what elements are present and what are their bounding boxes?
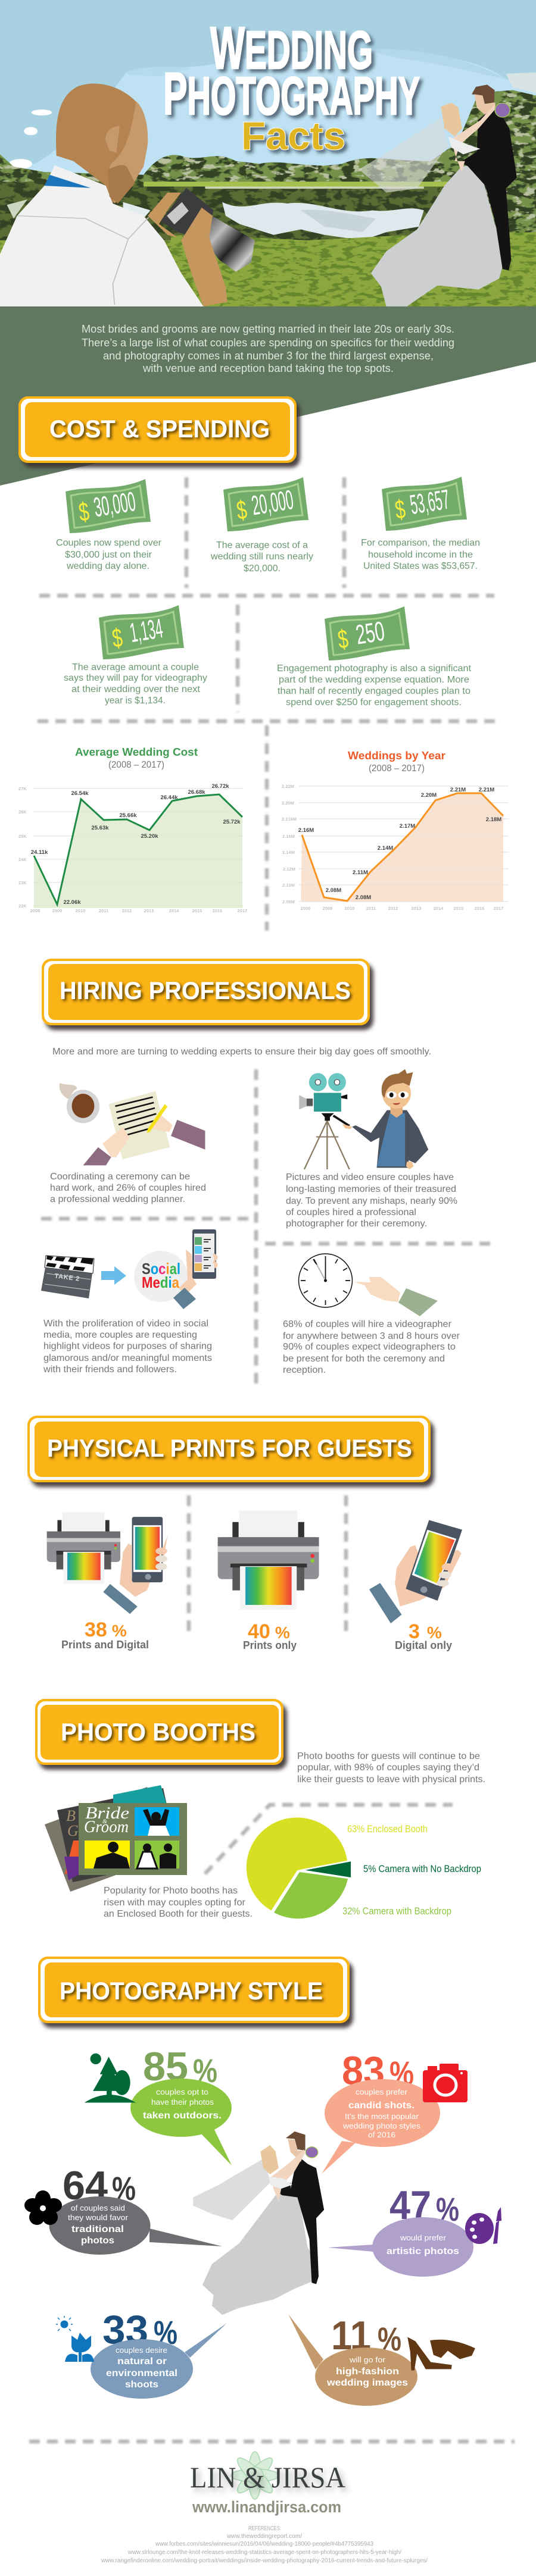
text: enclosed booth: risen with may couples opting for: [104, 1898, 246, 1908]
chart: average wedding cost: 26.54k: [71, 790, 89, 797]
bubble: 83% candid: couples prefer: [356, 2088, 407, 2096]
icon: photo strips: G: [67, 1822, 79, 1839]
bubble: 85% outdoors: [130, 2044, 232, 2165]
text: average cost: $20,000.: [244, 564, 281, 574]
bill: $250: $: [336, 624, 350, 655]
text: median income: United States was $53,657.: [363, 561, 478, 571]
heading: photography style: [38, 1957, 350, 2023]
references: www.slrlounge.com/the-knot-releases-wedding-statistics-average-spent-on-photographers-hits-5-year-high/: [127, 2549, 401, 2556]
bubble: 85% outdoors: couples opt to: [156, 2088, 208, 2096]
bill: $1,134: 1,134: [127, 612, 165, 648]
bubble: 64% traditional: they would favor: [68, 2214, 128, 2222]
chart: weddings by year: 2.08M: [282, 899, 295, 904]
stat: prints only: 40 %: [248, 1620, 290, 1643]
text: engagement photography: spend over $250 for engagement shoots.: [286, 697, 462, 708]
bubble: 83% candid: It’s the most popular: [345, 2112, 419, 2121]
text: planner: [50, 1172, 206, 1204]
stat: prints only: Prints only: [243, 1639, 297, 1651]
text: videographer: [283, 1319, 460, 1375]
bubble: 85% outdoors: taken outdoors.: [143, 2111, 222, 2121]
chart: weddings by year: 2014: [434, 906, 444, 911]
bubble: 47% artistic: would prefer: [400, 2234, 446, 2242]
chart: weddings by year: 2.22M: [282, 784, 294, 789]
icon: clapper board: [41, 1256, 94, 1298]
bubble: 33% natural: shoots: [125, 2380, 158, 2390]
chart: weddings by year: 2013: [412, 906, 421, 911]
text: planner: a professional wedding planner.: [50, 1194, 185, 1204]
chart: average wedding cost: 26.72k: [211, 783, 229, 790]
heading: hiring professionals: HIRING PROFESSIONALS: [60, 976, 351, 1004]
bill: $53,657: 53,657: [408, 483, 451, 520]
chart: average wedding cost: 26K: [18, 809, 27, 815]
bubble: 64% traditional: 64: [63, 2163, 108, 2208]
chart: weddings by year: 2.16M: [298, 827, 314, 834]
icon: social media hand and phone: [134, 1229, 217, 1309]
icon: large printer: [218, 1511, 319, 1610]
green band background: [0, 306, 536, 486]
chart: average wedding cost: 25.66k: [119, 812, 137, 819]
bubble: 64% traditional: [49, 2163, 222, 2255]
chart: average wedding cost: 26.68k: [188, 789, 205, 796]
chart: weddings by year: 2.12M: [283, 866, 295, 872]
bill: $30,000: $: [77, 497, 91, 527]
text: social video: media, more couples are requesting: [43, 1330, 197, 1340]
hero illustration: [0, 0, 536, 306]
chart: average wedding cost: 2015: [192, 908, 202, 913]
title: [163, 15, 420, 158]
chart: average wedding cost: 2017: [238, 908, 247, 913]
heading: photo booths: PHOTO BOOTHS: [61, 1718, 255, 1746]
logo: lin and jirsa: LIN & JIRSA: [190, 2461, 345, 2494]
chart: average wedding cost: [18, 746, 247, 913]
icon: flower: [24, 2190, 62, 2225]
text: couples spend: [56, 538, 162, 571]
chart: average wedding cost: 24.11k: [31, 849, 48, 856]
chart: weddings by year: 2.20M: [282, 800, 294, 806]
icon: social media hand and phone: Media: [142, 1273, 179, 1291]
bubble: 83% candid: wedding photo styles: [342, 2122, 420, 2130]
heading: cost and spending: [18, 396, 297, 463]
text: engagement photography: than half of recently engaged couples plan to: [278, 686, 470, 696]
heading: hiring professionals: [42, 959, 370, 1025]
text: engagement photography: Engagement photography is also a significant: [277, 663, 472, 674]
text: engagement photography: part of the wedding expense equation. More: [279, 675, 469, 685]
text: photographer: of couples hired a professional: [286, 1207, 416, 1217]
chart: average wedding cost: 22K: [18, 903, 27, 909]
bubble: 83% candid: of 2016: [368, 2131, 395, 2139]
text: photographer: [286, 1172, 457, 1229]
bubble: 47% artistic: %: [436, 2190, 459, 2228]
text: videographer: be present for both the ceremony and: [283, 1354, 445, 1364]
bubble: 11% high fashion: high-fashion: [336, 2367, 399, 2377]
text: videographer: for anywhere between 3 and 8 hours over: [283, 1331, 460, 1341]
text: median income: [361, 538, 480, 571]
chart: weddings by year: 2.18M: [486, 816, 501, 823]
panel: hiring professionals: [41, 959, 460, 1375]
chart: average wedding cost: (2008 – 2017): [108, 760, 164, 770]
text: videography: The average amount a couple: [72, 662, 199, 672]
text: social video: With the proliferation of video in social: [43, 1319, 208, 1329]
text: average cost: wedding still runs nearly: [210, 552, 313, 562]
chart: weddings by year: 2016: [475, 906, 484, 911]
text: median income: For comparison, the median: [361, 538, 480, 548]
text: booths popular: Photo booths for guests will continue to be: [297, 1751, 480, 1761]
icon: hand with phone: [369, 1520, 462, 1623]
text: videographer: reception.: [283, 1365, 326, 1375]
bubble: 64% traditional: photos: [81, 2236, 114, 2246]
stat: digital only: Digital only: [395, 1639, 452, 1651]
bubble: 33% natural: [91, 2307, 227, 2399]
chart: average wedding cost: Average Wedding Cost: [75, 746, 198, 758]
intro text: and photography comes in at number 3 for the third largest expense,: [103, 349, 434, 362]
bill: $30,000: [66, 479, 151, 533]
chart: average wedding cost: 2009: [52, 908, 62, 913]
intro text: There’s a large list of what couples are spending on specifics for their wedding: [82, 336, 454, 349]
icon: film camera and man: [299, 1069, 428, 1169]
text: enclosed booth: Popularity for Photo booths has: [104, 1886, 238, 1896]
tree line: [0, 90, 536, 235]
references: www.rangefinderonline.com/wedding-portrait/weddings/inside-wedding-photography-2016-current-trends-and-future-splurges/: [101, 2558, 428, 2564]
chart: weddings by year: 2.20M: [421, 792, 437, 799]
panel: photo booths: [35, 1699, 485, 1919]
chart: average wedding cost: 2016: [213, 908, 222, 913]
intro text: Most brides and grooms are now getting married in their late 20s or early 30s.: [82, 323, 454, 335]
icon: photo strips: Groom: [84, 1818, 129, 1836]
bubble: 11% high fashion: wedding images: [326, 2378, 408, 2388]
icon: printer and phone: [47, 1513, 167, 1614]
bubble: 83% candid: candid shots.: [348, 2101, 415, 2111]
chart: average wedding cost: 2010: [76, 908, 85, 913]
stat: prints and digital: [61, 1619, 149, 1651]
chart: weddings by year: 2.16M: [282, 834, 295, 839]
references: REFERENCES:: [248, 2525, 281, 2532]
icon: social media hand and phone: Social: [142, 1260, 180, 1278]
bubble: 33% natural: natural or: [117, 2356, 167, 2367]
bill: $20,000: [223, 477, 308, 531]
text: videography: [64, 662, 207, 706]
camera and hands: [148, 188, 255, 306]
text: enclosed booth: [104, 1886, 253, 1919]
logo: ornament: [231, 2452, 279, 2499]
chart: average wedding cost: 2013: [144, 908, 154, 913]
bubble: 64% traditional: of couples said: [71, 2204, 125, 2212]
bubble: 83% candid: [322, 2048, 440, 2174]
bubble: 33% natural: couples desire: [116, 2346, 167, 2355]
chart: average wedding cost: 27K: [18, 786, 27, 791]
chart: weddings by year: Weddings by Year: [348, 750, 445, 762]
text: social video: with their friends and followers.: [43, 1364, 177, 1375]
chart: weddings by year: 2.08M: [326, 887, 341, 894]
bubble: 11% high fashion: [288, 2313, 417, 2406]
chart: weddings by year: 2.10M: [282, 882, 295, 888]
text: planner: hard work, and 26% of couples hired: [50, 1183, 206, 1193]
text: photographer: day. To prevent any mishaps, nearly 90%: [286, 1196, 457, 1206]
chart: weddings by year: 2.14M: [282, 850, 295, 855]
text: videography: says they will pay for videography: [64, 673, 207, 683]
text: planner: Coordinating a ceremony can be: [50, 1172, 190, 1182]
bubble: 64% traditional: %: [112, 2170, 136, 2207]
heading: physical prints for guests: PHYSICAL PRINTS FOR GUESTS: [47, 1434, 412, 1462]
references: [101, 2525, 428, 2564]
stat: digital only: 3 %: [409, 1620, 442, 1643]
icon: photo strips: &: [102, 1818, 107, 1825]
icon: planner writing: [60, 1083, 205, 1165]
icon: tulip and sun: [56, 2316, 94, 2362]
chart: weddings by year: 2008: [301, 906, 310, 911]
bill: $1,134: [99, 605, 184, 659]
bubble: 47% artistic: 47: [389, 2183, 431, 2228]
bride and groom: [359, 84, 517, 306]
chart: average wedding cost: 2008: [30, 908, 40, 913]
text: average cost: [210, 540, 313, 574]
panel: footer: [101, 2452, 428, 2564]
text: booths popular: popular, with 98% of couples saying they’d: [297, 1763, 479, 1773]
icon: camera: [423, 2064, 468, 2102]
text: enclosed booth: an Enclosed Booth for their guests.: [104, 1909, 253, 1919]
chart: weddings by year: 2012: [388, 906, 398, 911]
panel: cost and spending: [18, 396, 509, 913]
text: engagement photography: [277, 663, 472, 708]
text: booths popular: like their guests to leave with physical prints.: [297, 1774, 485, 1785]
bill: $30,000: 30,000: [92, 486, 138, 522]
text: couples spend: Couples now spend over: [56, 538, 162, 548]
stat: digital only: [395, 1620, 452, 1651]
arrow: clapper to social media: [101, 1266, 126, 1285]
bill: $250: [325, 606, 410, 661]
bubble: 33% natural: 33: [102, 2307, 148, 2352]
bubble: 83% candid: %: [389, 2054, 414, 2092]
chart: average wedding cost: 2012: [122, 908, 132, 913]
bubble: 33% natural: environmental: [106, 2368, 177, 2378]
text: couples spend: wedding day alone.: [66, 561, 149, 571]
bubble: 33% natural: %: [154, 2314, 177, 2351]
text: booths popular: [297, 1751, 485, 1785]
bubble: 11% high fashion: 11: [331, 2313, 371, 2358]
chart: average wedding cost: 25.72k: [223, 819, 241, 825]
icon: trees: [85, 2054, 136, 2102]
chart: average wedding cost: 2011: [99, 908, 108, 913]
panel: photography style: [24, 1957, 501, 2406]
text: videographer: 90% of couples expect videographers to: [283, 1342, 456, 1352]
bubble: 85% outdoors: have their photos: [151, 2098, 214, 2107]
stat: prints and digital: Prints and Digital: [61, 1639, 149, 1651]
panel: physical prints: [27, 1416, 462, 1651]
text: median income: household income in the: [368, 550, 473, 560]
website: www.linandjirsa.com: [192, 2498, 341, 2516]
heading: photography style: PHOTOGRAPHY STYLE: [60, 1977, 323, 2005]
chart: weddings by year: (2008 – 2017): [369, 763, 425, 774]
bill: $20,000: 20,000: [250, 484, 295, 521]
pie chart: booth types: 63% Enclosed Booth: [347, 1824, 428, 1835]
references: www.forbes.com/sites/winniesun/2016/04/06/wedding-18000-people/#4b4775395943: [155, 2541, 373, 2547]
text: photographer: Pictures and video ensure couples have: [286, 1172, 454, 1182]
title: WEDDING: [210, 15, 373, 82]
icon: clock and pointing hand: [299, 1254, 438, 1316]
chart: average wedding cost: 24K: [18, 857, 27, 862]
intro text: [82, 323, 454, 374]
text: social video: [43, 1319, 212, 1375]
bill: $53,657: $: [393, 494, 407, 525]
chart: weddings by year: 2011: [366, 906, 376, 911]
icon: clapper board: TAKE 2: [54, 1273, 80, 1283]
lake: [0, 181, 451, 240]
chart: weddings by year: [282, 750, 509, 911]
text: photographer: photographer for their ceremony.: [286, 1219, 427, 1229]
chart: weddings by year: 2009: [323, 906, 332, 911]
icon: shoe and sunglasses: [407, 2337, 475, 2370]
text: average cost: The average cost of a: [216, 540, 308, 550]
bubble: 47% artistic: [328, 2183, 473, 2277]
photographer head: [56, 83, 148, 204]
icon: photo strips: [45, 1785, 187, 1892]
bubble: 83% candid: 83: [342, 2048, 385, 2093]
chart: weddings by year: 2.21M: [479, 787, 494, 793]
photographer shirt: [0, 165, 204, 306]
chart: average wedding cost: 26.44k: [160, 794, 178, 801]
intro line: More and more are turning to wedding experts to ensure their big day goes off smoothly.: [52, 1047, 431, 1057]
chart: weddings by year: 2.17M: [400, 823, 415, 830]
text: social video: highlight videos for purposes of sharing: [43, 1341, 212, 1351]
chart: average wedding cost: 22.06k: [63, 899, 81, 906]
chart: weddings by year: 2.08M: [356, 894, 371, 901]
chart: weddings by year: 2.21M: [450, 787, 466, 793]
chart: weddings by year: 2.11M: [353, 869, 368, 876]
pie chart: booth types: [247, 1817, 481, 1918]
stat: prints and digital: 38 %: [85, 1619, 127, 1641]
title: Facts: [241, 114, 345, 158]
text: videographer: 68% of couples will hire a videographer: [283, 1319, 452, 1329]
bubble: 47% artistic: artistic photos: [387, 2246, 459, 2256]
chart: weddings by year: 2015: [454, 906, 463, 911]
chart: weddings by year: 2.216M: [282, 816, 297, 822]
icon: palette and brush: [465, 2207, 501, 2244]
bubble: 85% outdoors: %: [193, 2052, 217, 2089]
chart: average wedding cost: 25.20k: [141, 833, 158, 840]
pie chart: booth types: 5% Camera with No Backdrop: [363, 1864, 481, 1874]
icon: photo strips: Bride: [85, 1804, 129, 1823]
text: couples spend: $30,000 just on their: [65, 550, 152, 560]
icon: photo strips: B: [66, 1807, 76, 1824]
blue collar: [45, 175, 91, 188]
heading: physical prints for guests: [27, 1416, 431, 1482]
bill: $20,000: $: [235, 495, 249, 525]
stat: prints only: [243, 1620, 297, 1651]
chart: weddings by year: 2.14M: [378, 845, 393, 852]
text: photographer: long-lasting memories of their treasured: [286, 1184, 456, 1194]
chart: weddings by year: 2010: [345, 906, 354, 911]
text: videography: year is $1,134.: [105, 696, 166, 706]
illustration: central couple: [193, 2131, 324, 2315]
text: videography: at their wedding over the next: [71, 684, 201, 694]
references: www.theweddingreport.com/: [226, 2533, 302, 2540]
bubble: 11% high fashion: %: [378, 2320, 401, 2358]
bill: $53,657: [382, 477, 467, 531]
chart: weddings by year: 2017: [494, 906, 503, 911]
chart: average wedding cost: 23K: [18, 880, 27, 885]
bubble: 64% traditional: traditional: [71, 2224, 124, 2234]
pie chart: booth types: 32% Camera with Backdrop: [342, 1906, 451, 1917]
bubble: 11% high fashion: will go for: [349, 2356, 385, 2364]
bill: $1,134: $: [110, 623, 124, 653]
heading: photo booths: [35, 1699, 283, 1765]
chart: average wedding cost: 2014: [169, 908, 179, 913]
chart: average wedding cost: 25.63k: [91, 825, 109, 831]
heading: cost and spending: COST & SPENDING: [49, 415, 270, 443]
chart: average wedding cost: 25K: [18, 834, 27, 839]
text: social video: glamorous and/or meaningful moments: [43, 1353, 212, 1363]
intro text: with venue and reception band taking the top spots.: [142, 362, 394, 374]
bill: $250: 250: [354, 615, 387, 650]
bubble: 85% outdoors: 85: [143, 2044, 188, 2089]
grass: [0, 232, 536, 306]
